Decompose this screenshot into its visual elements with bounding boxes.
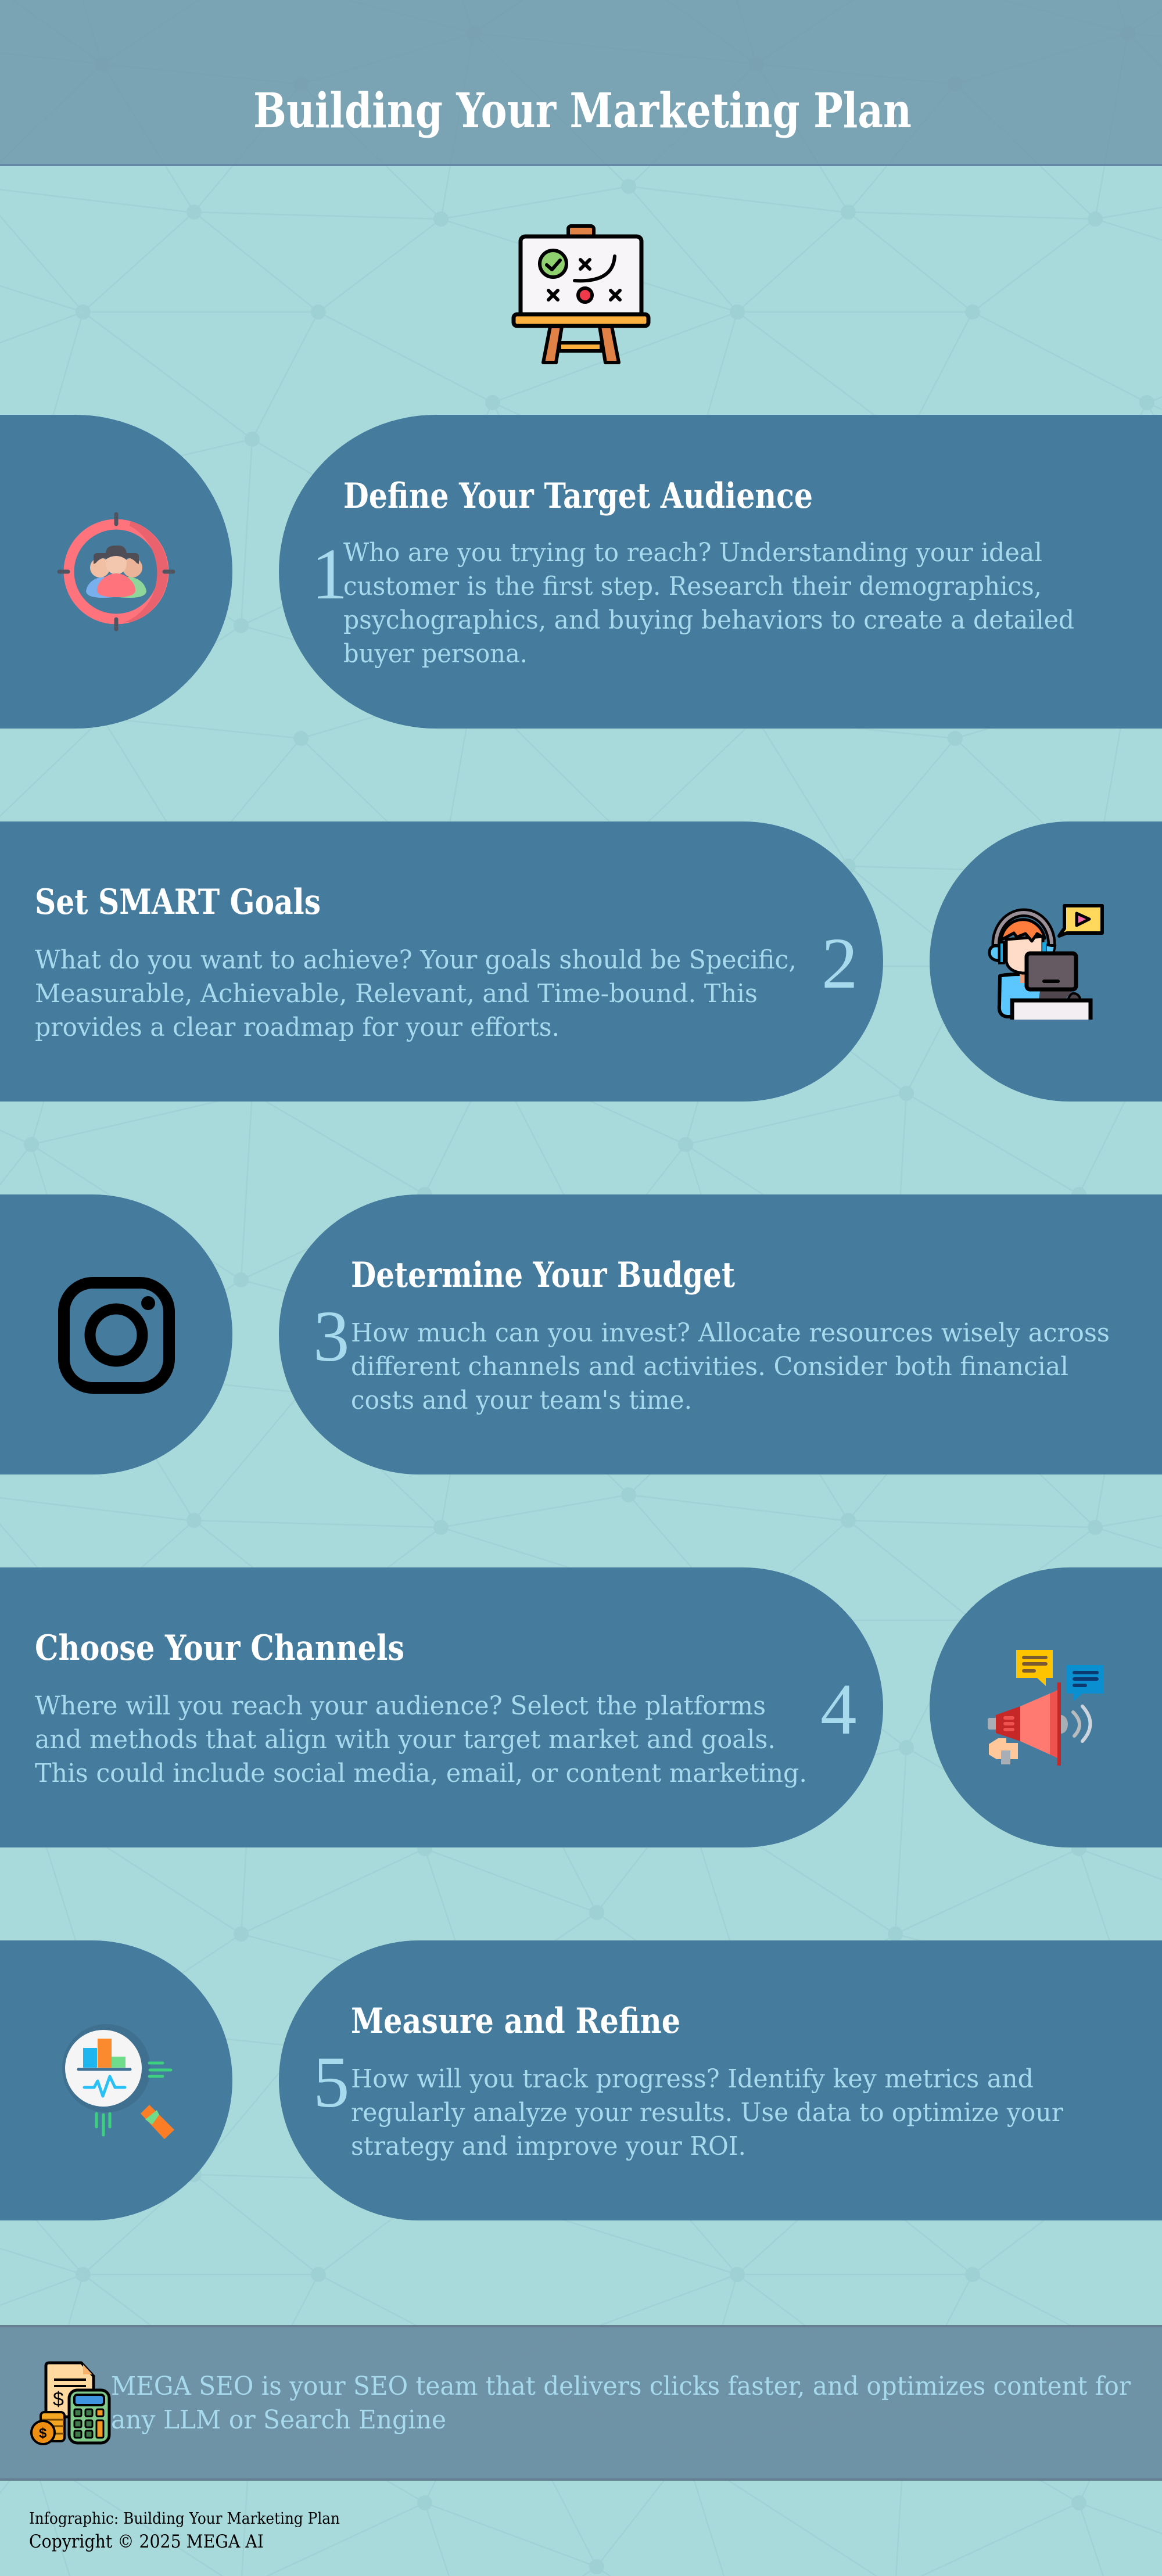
icon: invoice, calculator and coins <box>31 2363 109 2444</box>
footer credits: Infographic: Building Your Marketing Plan <box>29 2510 340 2528</box>
heading: set smart goals: Set SMART Goals <box>35 882 321 923</box>
icon: megaphone with speech bubbles <box>988 1650 1104 1766</box>
body text: step 1: customer is the first step. Research their demographics, <box>343 572 1042 601</box>
panel: step 1 icon <box>0 415 232 729</box>
panel: step 3 icon <box>0 1194 232 1474</box>
panel: step 1 content <box>279 415 1162 729</box>
header banner <box>0 0 1162 166</box>
heading: choose your channels: Choose Your Channels <box>35 1628 404 1669</box>
panel: step 4 content <box>0 1567 883 1847</box>
panel: step 5 icon <box>0 1940 232 2220</box>
footer credits <box>29 2510 340 2552</box>
panel: step 2 icon <box>930 821 1162 1102</box>
panel: step 3 content <box>279 1194 1162 1474</box>
icon: invoice, calculator and coins: $ <box>53 2388 64 2410</box>
heading: determine your budget: Determine Your Budget <box>351 1255 735 1296</box>
step number 4: 4 <box>820 1670 856 1750</box>
body text: step 1 <box>343 538 1074 669</box>
body text: step 3: How much can you invest? Allocate resources wisely across <box>351 1318 1110 1348</box>
body text: step 4: and methods that align with your target market and goals. <box>35 1725 776 1755</box>
step number 3: 3 <box>313 1297 350 1377</box>
step number 1: 1 <box>311 534 347 615</box>
body text: step 1: buyer persona. <box>343 639 528 669</box>
body text: step 4: This could include social media, email, or content marketing. <box>35 1759 807 1788</box>
footer banner text <box>111 2372 1131 2435</box>
body text: step 3: costs and your team's time. <box>351 1386 692 1415</box>
body text: step 1: psychographics, and buying behaviors to create a detailed <box>343 605 1074 635</box>
body text: step 4 <box>35 1691 807 1788</box>
icon: strategy board on easel <box>514 226 648 363</box>
body text: step 5: strategy and improve your ROI. <box>351 2132 746 2161</box>
icon: person with headset at computer <box>989 906 1102 1020</box>
footer banner text: any LLM or Search Engine <box>111 2405 446 2435</box>
panel: step 2 content <box>0 821 883 1102</box>
footer credits: Copyright © 2025 MEGA AI <box>29 2531 264 2552</box>
body text: step 2: Measurable, Achievable, Relevant, and Time-bound. This <box>35 979 758 1009</box>
body text: step 1: Who are you trying to reach? Understanding your ideal <box>343 538 1042 568</box>
body text: step 2 <box>35 945 797 1042</box>
body text: step 5: How will you track progress? Identify key metrics and <box>351 2064 1034 2094</box>
body text: step 2: What do you want to achieve? Your goals should be Specific, <box>35 945 797 975</box>
footer banner text: MEGA SEO is your SEO team that delivers clicks faster, and optimizes content for <box>111 2372 1131 2401</box>
heading: define your target audience: Define Your Target Audience <box>343 476 813 516</box>
icon: invoice, calculator and coins: $ <box>39 2426 47 2441</box>
icon: target audience <box>59 514 173 629</box>
body text: step 2: provides a clear roadmap for your efforts. <box>35 1013 560 1042</box>
step number 5: 5 <box>313 2043 350 2123</box>
body text: step 5 <box>351 2064 1064 2161</box>
icon: instagram logo <box>64 1283 169 1388</box>
title: Building Your Marketing Plan <box>253 83 912 139</box>
body text: step 3: different channels and activities. Consider both financial <box>351 1352 1068 1382</box>
body text: step 5: regularly analyze your results. Use data to optimize your <box>351 2098 1064 2127</box>
heading: measure and refine: Measure and Refine <box>351 2001 680 2042</box>
panel: step 4 icon <box>930 1567 1162 1847</box>
panel: step 5 content <box>279 1940 1162 2220</box>
body text: step 4: Where will you reach your audience? Select the platforms <box>35 1691 766 1721</box>
icon: analytics magnifier <box>62 2024 174 2139</box>
body text: step 3 <box>351 1318 1110 1415</box>
step number 2: 2 <box>822 924 858 1004</box>
footer banner: mega seo <box>0 2325 1162 2481</box>
